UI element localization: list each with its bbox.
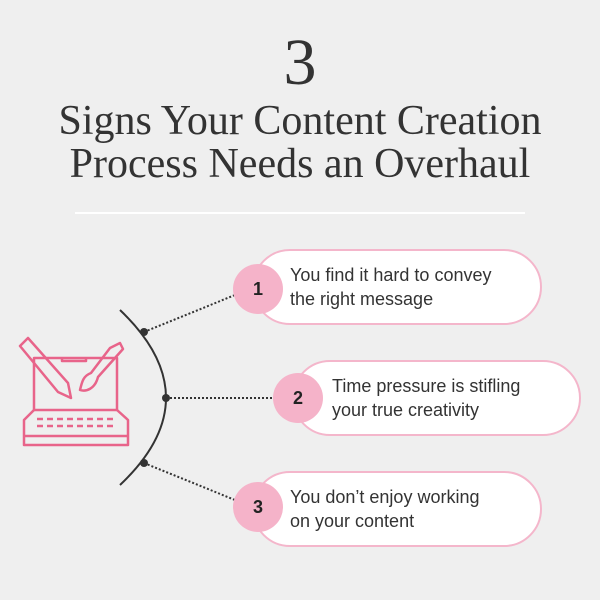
text: on your content — [290, 511, 414, 531]
item 1 — [233, 249, 542, 325]
text: Time pressure is stifling — [332, 376, 520, 396]
text: your true creativity — [332, 400, 479, 420]
arc connector — [120, 295, 275, 500]
title number: 3 — [284, 26, 316, 99]
text: 2 — [293, 388, 303, 408]
text: You find it hard to convey — [290, 265, 491, 285]
item 3 — [233, 471, 542, 547]
item 2 — [273, 360, 581, 436]
text: 1 — [253, 279, 263, 299]
text: You don’t enjoy working — [290, 487, 479, 507]
title: Signs Your Content Creation — [58, 98, 542, 144]
text: 3 — [253, 497, 263, 517]
title: Process Needs an Overhaul — [70, 141, 530, 187]
title — [58, 98, 542, 187]
text: the right message — [290, 289, 433, 309]
icon: laptop with pencil and brush — [20, 338, 128, 445]
